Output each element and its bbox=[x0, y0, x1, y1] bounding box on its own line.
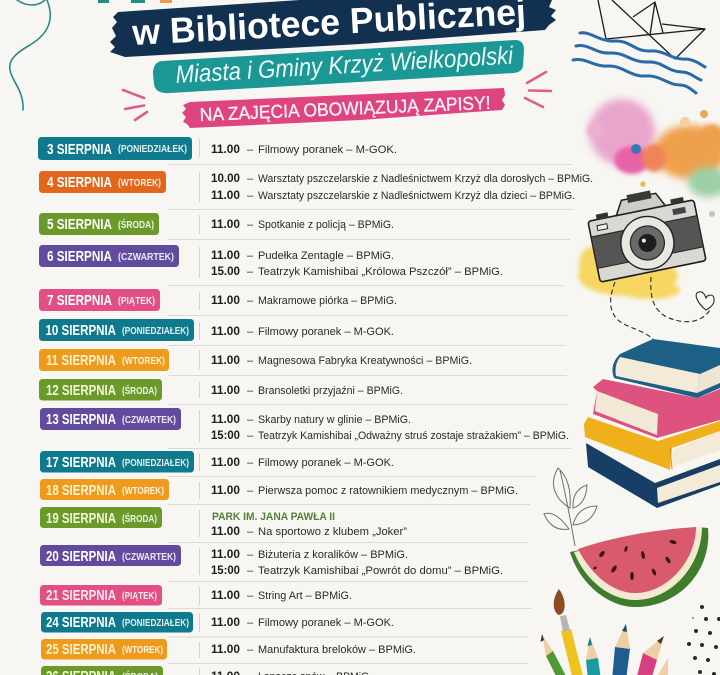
row: 13 sierpnia: Skarby natury w glinie – BPMiG. bbox=[258, 414, 411, 426]
watercolor splash bbox=[587, 99, 720, 217]
row: 6 sierpnia bbox=[39, 245, 563, 286]
row: 10 sierpnia: Filmowy poranek – M-GOK. bbox=[258, 326, 394, 338]
row: 3 sierpnia: 11.00 bbox=[211, 144, 240, 156]
row: 20 sierpnia: (CZWARTEK) bbox=[122, 552, 176, 563]
row: 13 sierpnia bbox=[40, 408, 572, 448]
row: 19 sierpnia: PARK IM. JANA PAWŁA II bbox=[212, 511, 335, 523]
icon: blue waves bbox=[573, 33, 705, 93]
row: 4 sierpnia: 11.00 bbox=[211, 190, 240, 202]
row: 17 sierpnia: 11.00 bbox=[211, 457, 240, 469]
row: 24 sierpnia: Filmowy poranek – M-GOK. bbox=[258, 617, 394, 629]
row: 3 sierpnia bbox=[38, 137, 572, 164]
row: 11 sierpnia bbox=[39, 349, 567, 376]
row: 18 sierpnia: 11.00 bbox=[211, 485, 240, 497]
icon: stack of books bbox=[584, 339, 720, 508]
icon: pencils bbox=[540, 624, 668, 675]
row: 19 sierpnia: (ŚRODA) bbox=[122, 512, 157, 525]
row: 19 sierpnia bbox=[40, 507, 528, 542]
dashed flight path with heart bbox=[611, 277, 714, 339]
row: 12 sierpnia: Bransoletki przyjaźni – BPMiG. bbox=[258, 385, 403, 397]
row: 13 sierpnia: 13 SIERPNIA bbox=[46, 412, 116, 428]
row: 10 sierpnia: – bbox=[247, 326, 254, 338]
row: 6 sierpnia: (CZWARTEK) bbox=[118, 252, 174, 263]
row: 3 sierpnia: 3 SIERPNIA bbox=[47, 142, 112, 158]
row: 13 sierpnia: 15:00 bbox=[211, 430, 240, 442]
decorative teal squiggle bbox=[10, 0, 50, 110]
row: 18 sierpnia: (WTOREK) bbox=[122, 486, 164, 497]
row: 19 sierpnia: 11.00 bbox=[211, 526, 240, 538]
row: 20 sierpnia bbox=[40, 545, 528, 582]
row: 13 sierpnia: – bbox=[247, 430, 254, 442]
pencil green bbox=[540, 634, 567, 675]
row: 7 sierpnia: – bbox=[247, 295, 254, 307]
row: 6 sierpnia: Pudełka Zentagle – BPMiG. bbox=[258, 250, 394, 262]
row: 4 sierpnia: Warsztaty pszczelarskie z Nadleśnictwem Krzyż dla dzieci – BPMiG. bbox=[258, 190, 575, 202]
row: 25 sierpnia: 25 SIERPNIA bbox=[46, 642, 116, 658]
accent rays left bbox=[123, 90, 147, 120]
row: 5 sierpnia bbox=[39, 213, 570, 240]
row: 17 sierpnia bbox=[40, 451, 536, 476]
row: 18 sierpnia bbox=[40, 479, 530, 504]
row: 19 sierpnia: – bbox=[247, 526, 254, 538]
row: 21 sierpnia: 21 SIERPNIA bbox=[46, 588, 116, 604]
row: 18 sierpnia: – bbox=[247, 485, 254, 497]
row: 17 sierpnia: Filmowy poranek – M-GOK. bbox=[258, 457, 394, 469]
book: blue top bbox=[612, 339, 720, 398]
yellow splash behind camera bbox=[578, 247, 680, 299]
row: 25 sierpnia: 11.00 bbox=[211, 644, 240, 656]
icon: paint brush bbox=[554, 589, 584, 675]
row: 11 sierpnia: 11.00 bbox=[211, 355, 240, 367]
row: 20 sierpnia: – bbox=[247, 549, 254, 561]
row: 19 sierpnia: 19 SIERPNIA bbox=[46, 511, 116, 527]
subheading banner: Miasta i Gminy: Miasta i Gminy Krzyż Wielkopolski bbox=[175, 42, 515, 89]
row: 4 sierpnia bbox=[39, 171, 593, 210]
row: 24 sierpnia: (PONIEDZIAŁEK) bbox=[122, 618, 189, 629]
row: 18 sierpnia: Pierwsza pomoc z ratownikiem medycznym – BPMiG. bbox=[258, 485, 518, 497]
row: 10 sierpnia: 10 SIERPNIA bbox=[46, 323, 116, 339]
clipped title remnants bbox=[98, 0, 172, 3]
accent rays right bbox=[525, 72, 551, 107]
row: 12 sierpnia: (ŚRODA) bbox=[122, 384, 157, 397]
row: 4 sierpnia: – bbox=[247, 173, 254, 185]
row: 5 sierpnia: 11.00 bbox=[211, 219, 240, 231]
row: 5 sierpnia: Spotkanie z policją – BPMiG. bbox=[258, 219, 394, 231]
book: pink bbox=[593, 379, 720, 438]
row: 5 sierpnia: (ŚRODA) bbox=[118, 218, 154, 231]
book: navy bottom bbox=[586, 443, 720, 508]
row: 7 sierpnia: Makramowe piórka – BPMiG. bbox=[258, 295, 397, 307]
row: 24 sierpnia: 24 SIERPNIA bbox=[46, 615, 116, 631]
row: 17 sierpnia: (PONIEDZIAŁEK) bbox=[122, 458, 189, 469]
row: 13 sierpnia: (CZWARTEK) bbox=[122, 415, 176, 426]
row: 7 sierpnia: 7 SIERPNIA bbox=[47, 293, 112, 309]
decorative dots bbox=[687, 605, 720, 675]
row: 18 sierpnia: 18 SIERPNIA bbox=[46, 483, 116, 499]
row: 24 sierpnia: – bbox=[247, 617, 254, 629]
row: 11 sierpnia: (WTOREK) bbox=[122, 356, 165, 367]
row: 11 sierpnia: Magnesowa Fabryka Kreatywności – BPMiG. bbox=[258, 355, 472, 367]
pencil natural bbox=[655, 658, 668, 675]
row: 6 sierpnia: – bbox=[247, 250, 254, 262]
row: 20 sierpnia: 20 SIERPNIA bbox=[46, 549, 116, 565]
row: 3 sierpnia: (PONIEDZIAŁEK) bbox=[118, 144, 187, 155]
row: 4 sierpnia: – bbox=[247, 190, 254, 202]
row: 21 sierpnia: (PIĄTEK) bbox=[122, 591, 157, 602]
row: 20 sierpnia: 15:00 bbox=[211, 565, 240, 577]
row: 6 sierpnia: 6 SIERPNIA bbox=[47, 249, 112, 265]
row: 13 sierpnia: Teatrzyk Kamishibai „Odważny struś zostaje strażakiem” – BPMiG. bbox=[258, 430, 569, 442]
row: 7 sierpnia bbox=[39, 289, 567, 316]
row: 6 sierpnia: 15.00 bbox=[211, 266, 240, 278]
row: 4 sierpnia: (WTOREK) bbox=[118, 178, 161, 189]
row: 25 sierpnia: Manufaktura breloków – BPMiG. bbox=[258, 644, 416, 656]
row: 17 sierpnia: 17 SIERPNIA bbox=[46, 455, 116, 471]
schedule table bbox=[38, 137, 593, 675]
row: 3 sierpnia: Filmowy poranek – M-GOK. bbox=[258, 144, 397, 156]
row: 13 sierpnia: – bbox=[247, 414, 254, 426]
row: 20 sierpnia: Teatrzyk Kamishibai „Powrót do domu” – BPMiG. bbox=[258, 565, 503, 577]
row: 12 sierpnia bbox=[39, 379, 567, 404]
row: 11 sierpnia: – bbox=[247, 355, 254, 367]
row: 20 sierpnia: 11.00 bbox=[211, 549, 240, 561]
row: 12 sierpnia: 11.00 bbox=[211, 385, 240, 397]
icon: camera bbox=[584, 182, 706, 282]
row: 4 sierpnia: 4 SIERPNIA bbox=[47, 175, 112, 191]
pencil pink bbox=[636, 636, 664, 675]
row: 17 sierpnia: – bbox=[247, 457, 254, 469]
pencil teal bbox=[586, 637, 601, 675]
icon: paper boat bbox=[598, 0, 705, 59]
row: 20 sierpnia: – bbox=[247, 565, 254, 577]
row: 6 sierpnia: 11.00 bbox=[211, 250, 240, 262]
row: 10 sierpnia bbox=[39, 319, 565, 346]
row: 24 sierpnia: 11.00 bbox=[211, 617, 240, 629]
row: 7 sierpnia: 11.00 bbox=[211, 295, 240, 307]
row: 3 sierpnia: – bbox=[247, 144, 254, 156]
row: 10 sierpnia: (PONIEDZIAŁEK) bbox=[122, 326, 189, 337]
pencil blue bbox=[612, 624, 630, 675]
row: 4 sierpnia: 10.00 bbox=[211, 173, 240, 185]
row: 7 sierpnia: (PIĄTEK) bbox=[118, 296, 155, 307]
icon: watermelon slice bbox=[570, 527, 708, 607]
row: 4 sierpnia: Warsztaty pszczelarskie z Nadleśnictwem Krzyż dla dorosłych – BPMiG. bbox=[258, 173, 593, 185]
row: 20 sierpnia: Biżuteria z koralików – BPMiG. bbox=[258, 549, 408, 561]
row: 24 sierpnia bbox=[41, 612, 528, 637]
row: 6 sierpnia: Teatrzyk Kamishibai „Królowa Pszczół” – BPMiG. bbox=[258, 266, 503, 278]
row: 26 sierpnia bbox=[41, 666, 372, 675]
row: 21 sierpnia: – bbox=[247, 590, 254, 602]
row: 5 sierpnia: 5 SIERPNIA bbox=[47, 217, 112, 233]
row: 5 sierpnia: – bbox=[247, 219, 254, 231]
row: 11 sierpnia: 11 SIERPNIA bbox=[46, 353, 116, 369]
book: yellow bbox=[584, 417, 720, 470]
row: 6 sierpnia: – bbox=[247, 266, 254, 278]
notice banner: na zajęcia obowiązują zapisy: NA ZAJĘCIA OBOWIĄZUJĄ ZAPISY! bbox=[199, 92, 491, 125]
row: 19 sierpnia: Na sportowo z klubem „Joker” bbox=[258, 526, 407, 538]
row: 21 sierpnia: String Art – BPMiG. bbox=[258, 590, 352, 602]
row: 25 sierpnia bbox=[41, 639, 528, 664]
icon: leaf sprig bbox=[544, 468, 597, 546]
row: 10 sierpnia: 11.00 bbox=[211, 326, 240, 338]
row: 13 sierpnia: 11.00 bbox=[211, 414, 240, 426]
row: 25 sierpnia: – bbox=[247, 644, 254, 656]
row: 21 sierpnia: 11.00 bbox=[211, 590, 240, 602]
row: 21 sierpnia bbox=[40, 585, 532, 608]
row: 12 sierpnia: – bbox=[247, 385, 254, 397]
row: 25 sierpnia: (WTOREK) bbox=[122, 645, 163, 656]
row: 12 sierpnia: 12 SIERPNIA bbox=[46, 383, 116, 399]
